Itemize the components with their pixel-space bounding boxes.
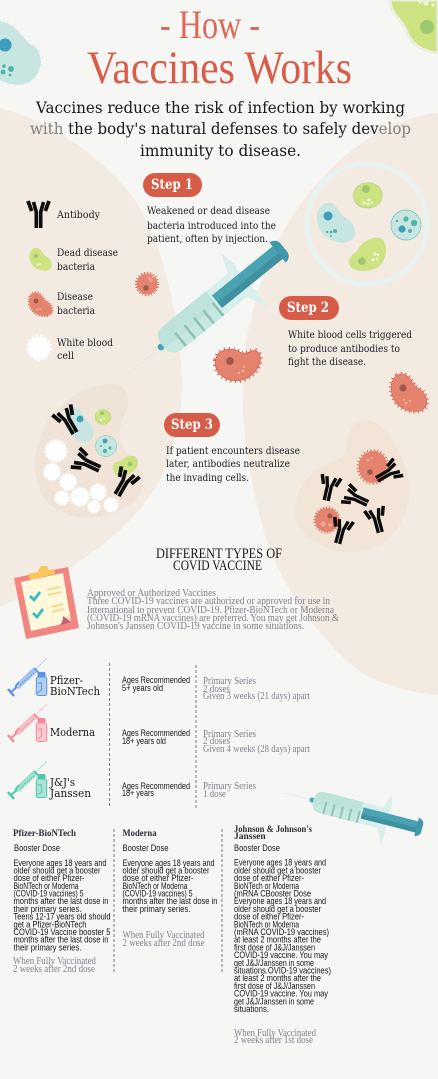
booster heading: [234, 825, 312, 842]
step 2 badge: Step 2: [287, 300, 329, 316]
icon: top right green bacteria: [390, 0, 438, 53]
petri: teal cell right: [391, 210, 421, 240]
booster body: BioNTech or Moderna: [234, 919, 299, 929]
booster body: [234, 843, 331, 1014]
booster fully vaccinated: 2 weeks after 1st dose: [234, 1035, 313, 1046]
booster body: older should get a booster: [122, 866, 210, 876]
booster body: dose of either Pfizer-: [234, 912, 304, 922]
legend: disease bacteria: Disease: [57, 292, 93, 303]
primary series column: Primary Series: [203, 781, 256, 792]
ages recommended column: 18+ years old: [122, 736, 166, 746]
primary series column: Given 3 weeks (21 days) apart: [203, 691, 310, 702]
intro text: [30, 99, 411, 160]
legend: dead disease bacteria: [29, 248, 118, 273]
booster body: their primary series.: [14, 942, 82, 952]
booster body: (COVID-19 vaccines) 5: [14, 888, 84, 898]
booster body: dose of either Pfizer-: [14, 873, 84, 883]
icon: large bacteria: [215, 349, 260, 381]
booster body: their primary series.: [122, 904, 190, 914]
inner blob: step 3 left: [35, 384, 143, 518]
booster heading: Janssen: [234, 832, 266, 842]
booster body: dose of either Pfizer-: [234, 873, 304, 883]
booster body: Everyone ages 18 years and: [122, 858, 214, 868]
step 3 badge: Step 3: [171, 417, 213, 433]
legend: [27, 201, 118, 362]
step 3 left cluster: [44, 404, 140, 513]
booster body: get J&J/Janssen in some: [234, 958, 314, 968]
booster fully vaccinated: When Fully Vaccinated: [234, 1028, 317, 1039]
ages recommended column: Ages Recommended: [122, 728, 190, 738]
step 1 text: bacteria introduced into the: [147, 221, 276, 232]
booster column: Moderna: [122, 829, 218, 949]
icon: Moderna syringe and vial: [8, 704, 47, 742]
background blob: left: [0, 108, 182, 607]
booster body: at least 2 months after the: [234, 935, 321, 945]
booster heading: Moderna: [122, 829, 157, 839]
booster heading: Johnson & Johnson's: [234, 825, 312, 835]
booster body: first dose of J&J/Janssen: [234, 981, 315, 991]
white blood cells: [44, 440, 118, 513]
booster body: COVID-19 Vaccine booster 5: [14, 927, 110, 937]
booster body: BioNTech or Moderna: [234, 881, 299, 891]
booster body: BioNTech or Moderna: [122, 881, 188, 891]
booster body: [122, 843, 218, 914]
booster body: situations.: [234, 1004, 269, 1014]
booster body: (mRNA CBooster Dose: [234, 888, 311, 898]
intro text: immunity to disease.: [140, 142, 301, 160]
legend: dead disease bacteria: bacteria: [57, 262, 95, 273]
ages recommended column: Ages Recommended: [122, 781, 190, 791]
legend: disease bacteria: [29, 292, 95, 317]
booster body: older should get a booster: [234, 904, 321, 914]
step 3 text: later, antibodies neutralize: [166, 459, 290, 470]
primary series column: Given 4 weeks (28 days) apart: [203, 744, 310, 755]
icon: top left teal bacteria: [0, 22, 41, 85]
legend: dead disease bacteria: Dead disease: [57, 248, 118, 259]
vaccine intro text: Approved or Authorized Vaccines: [87, 588, 216, 599]
booster fully vaccinated: 2 weeks after 2nd dose: [13, 964, 95, 975]
booster column: Johnson & Johnson's Janssen: [234, 825, 331, 1046]
icon: right bacteria: [391, 374, 427, 411]
booster body: situations.OVID-19 vaccines): [234, 966, 331, 976]
disease bacteria round: [315, 508, 339, 532]
legend: antibody: Antibody: [56, 210, 100, 221]
booster fully vaccinated: [13, 956, 97, 975]
ages recommended column: 18+ years: [122, 788, 154, 798]
step 1 text: Weakened or dead disease: [147, 206, 270, 217]
legend: white blood cell: [27, 336, 114, 362]
label: J&J's Janssen: Janssen: [49, 786, 92, 800]
booster column: Pfizer-BioNTech: [13, 829, 110, 975]
step 2 text: to produce antibodies to: [288, 344, 400, 355]
label: Pfizer-BioNTech: Pfizer-: [50, 673, 83, 687]
icon: Pfizer syringe and vial: [8, 658, 47, 696]
booster body: Everyone ages 18 years and: [234, 858, 326, 868]
primary series column: 1 dose: [203, 789, 226, 800]
step 2 text: White blood cells triggered: [288, 330, 413, 341]
icon: clipboard: [14, 566, 79, 639]
label: Pfizer-BioNTech: [50, 673, 101, 698]
booster body: older should get a booster: [14, 866, 100, 876]
booster body: first dose of J&J/Janssen: [234, 942, 315, 952]
petri: green cell top: [354, 183, 382, 208]
booster body: Booster Dose: [234, 843, 280, 853]
booster body: at least 2 months after the: [234, 973, 321, 983]
booster body: Teens 12-17 years old should: [14, 912, 110, 922]
icon: petri dish: [307, 164, 427, 284]
icon: main syringe: [109, 220, 307, 400]
legend: white blood cell: White blood: [57, 338, 114, 349]
booster body: Everyone ages 18 years and: [234, 896, 326, 906]
booster fully vaccinated: [234, 1028, 317, 1046]
booster body: get J&J/Janssen in some: [234, 996, 314, 1006]
teal cell: [96, 436, 116, 456]
booster fully vaccinated: 2 weeks after 2nd dose: [122, 938, 205, 949]
step 3 text: the invading cells.: [166, 473, 249, 484]
label: J&J's Janssen: [49, 775, 92, 800]
step 3 text: [166, 446, 300, 484]
booster body: their primary series.: [14, 904, 82, 914]
booster body: [14, 843, 110, 952]
booster body: (COVID-19 vaccines) 5: [122, 888, 192, 898]
disease bacteria: [358, 451, 388, 483]
section heading: [156, 546, 282, 574]
booster body: BioNTech or Moderna: [14, 881, 78, 891]
icon: J&J syringe and vial: [8, 761, 47, 799]
antibodies: [52, 404, 140, 500]
booster body: months after the last dose in: [14, 896, 108, 906]
booster fully vaccinated: When Fully Vaccinated: [122, 930, 205, 941]
icon: lower syringe: [278, 769, 428, 854]
primary series column: 2 doses: [203, 736, 230, 747]
section heading: DIFFERENT TYPES OF: [156, 546, 282, 562]
booster body: get a Pfizer-BioNTech: [14, 920, 86, 930]
teal bacteria: [68, 407, 93, 442]
green cell: [95, 410, 111, 424]
legend: white blood cell: cell: [57, 351, 74, 362]
booster body: older should get a booster: [234, 865, 321, 875]
primary series column: Primary Series: [203, 729, 256, 740]
primary series column: [203, 676, 310, 800]
title: [87, 2, 352, 94]
label: Pfizer-BioNTech: BioNTech: [50, 684, 101, 698]
vaccine intro text: International to prevent COVID-19. Pfizer-BioNTech or Moderna: [87, 605, 334, 616]
petri: green cell bottom: [349, 238, 386, 271]
booster body: Booster Dose: [14, 843, 60, 853]
legend: antibody: [28, 201, 100, 228]
booster body: (mRNA COVID-19 vaccines): [234, 927, 329, 937]
title: Vaccines Works: [87, 42, 352, 94]
booster body: months after the last dose in: [14, 934, 108, 944]
intro text: Vaccines reduce the risk of infection by working: [35, 99, 405, 117]
primary series column: Primary Series: [203, 676, 256, 687]
legend: disease bacteria: bacteria: [57, 306, 95, 317]
primary series column: 2 doses: [203, 684, 230, 695]
booster body: months after the last dose in: [122, 896, 218, 906]
label: J&J's Janssen: J&J's: [49, 775, 75, 789]
booster fully vaccinated: When Fully Vaccinated: [13, 956, 97, 967]
booster body: Booster Dose: [122, 843, 168, 853]
vaccine intro text: Three COVID-19 vaccines are authorized or approved for use in: [87, 596, 331, 607]
icon: small bacteria: [136, 274, 158, 294]
vaccine intro text: [87, 588, 339, 632]
booster body: Everyone ages 18 years and: [14, 858, 106, 868]
booster heading: Pfizer-BioNTech: [13, 829, 77, 839]
step 2: [279, 296, 413, 368]
ages recommended column: [122, 675, 190, 798]
vaccine intro text: Johnson's Janssen COVID-19 vaccine in some situations.: [87, 621, 304, 632]
antibodies: [317, 459, 403, 546]
title: - How -: [160, 2, 260, 47]
step 2 text: fight the disease.: [288, 357, 366, 368]
booster body: COVID-19 vaccine. You may: [234, 989, 328, 999]
label: Moderna: Moderna: [50, 725, 95, 739]
step 2 text: [288, 330, 413, 368]
step 1 text: [147, 206, 276, 245]
step 1 badge: Step 1: [151, 177, 193, 193]
inner blob: step 3 right: [295, 420, 410, 552]
green bacteria: [113, 456, 138, 476]
booster fully vaccinated: [122, 930, 205, 949]
petri: teal cell left: [317, 203, 355, 243]
vaccine intro text: (COVID-19 mRNA vaccines) are preferred. You may get Johnson &: [87, 613, 339, 624]
step 1: [143, 173, 276, 245]
step 3: [164, 413, 300, 484]
step 3 right cluster: [315, 451, 403, 546]
background blob: right: [242, 113, 438, 695]
booster body: dose of either Pfizer-: [122, 873, 194, 883]
ages recommended column: 5+ years old: [122, 683, 163, 693]
intro text: with the body's natural defenses to safely develop: [30, 120, 411, 138]
section heading: COVID VACCINE: [173, 558, 262, 574]
step 1 text: patient, often by injection.: [147, 234, 268, 245]
step 3 text: If patient encounters disease: [166, 446, 300, 457]
booster body: COVID-19 vaccine. You may: [234, 950, 328, 960]
ages recommended column: Ages Recommended: [122, 675, 190, 685]
